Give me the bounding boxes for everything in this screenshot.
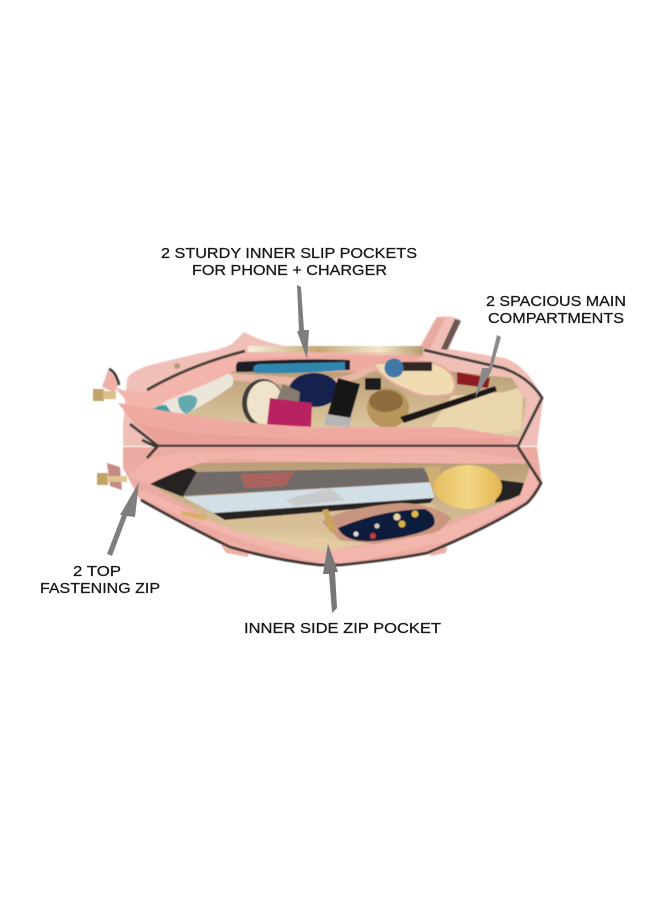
back handle tabs and upper body — [123, 316, 543, 446]
gold jar — [365, 378, 409, 428]
handbag viewed from above — [93, 316, 543, 566]
upper compartment interior — [145, 368, 526, 436]
left end tab — [102, 370, 118, 392]
dark red item — [457, 372, 490, 388]
gold slip pocket strip — [248, 346, 423, 355]
round compact — [242, 379, 312, 427]
label: top fastening zip: FASTENING ZIP — [40, 580, 160, 597]
pen — [400, 386, 497, 423]
lower body — [123, 447, 542, 566]
notebook — [183, 468, 434, 513]
dark seams — [109, 350, 542, 446]
label: main compartments: COMPARTMENTS — [488, 310, 624, 327]
lower zip lips — [127, 449, 538, 563]
arrow: zip — [107, 482, 139, 556]
upper gold zip pull — [93, 389, 116, 401]
lower gold zip pull — [97, 463, 127, 490]
label: slip pockets: FOR PHONE + CHARGER — [192, 262, 387, 279]
label: slip pockets — [161, 245, 417, 279]
lower black shadow — [150, 468, 524, 520]
floral zip pouch — [322, 503, 452, 545]
label: main compartments — [486, 293, 626, 327]
cream inner pouch with blue ball — [373, 358, 455, 396]
label: slip pockets: 2 STURDY INNER SLIP POCKETS — [161, 245, 417, 262]
label: inner side zip pocket: INNER SIDE ZIP POCKET — [244, 620, 441, 637]
arrow: main compartments — [475, 335, 501, 398]
arrow: slip pockets — [297, 285, 309, 359]
slip pocket with phone — [227, 355, 425, 386]
label: main compartments: 2 SPACIOUS MAIN — [486, 293, 626, 310]
arrow: inner side zip pocket — [323, 544, 338, 613]
lining print strip — [226, 503, 437, 530]
gold clasp — [181, 510, 207, 521]
label: top fastening zip: 2 TOP — [73, 563, 121, 580]
yellow bottle — [425, 465, 502, 509]
lower compartment interior — [150, 462, 531, 552]
deodorant bottle — [150, 373, 233, 414]
lower beige pocket — [257, 536, 345, 552]
navy tin — [289, 373, 339, 407]
label: top fastening zip — [40, 563, 160, 597]
upper zip lips — [114, 352, 520, 446]
black mascara tube — [324, 378, 360, 427]
lower dark seams — [141, 440, 541, 565]
bottom tabs — [217, 538, 447, 557]
pale lining on the right — [430, 388, 523, 434]
